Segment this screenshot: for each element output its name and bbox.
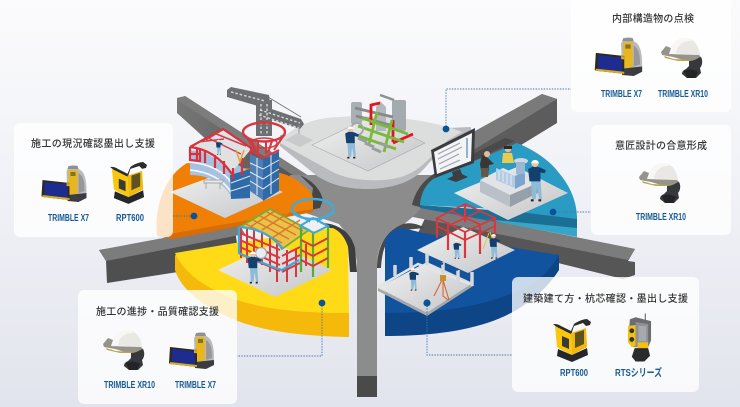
tanks [351, 95, 406, 131]
heading: 施工の進捗・品質確認支援 [96, 305, 219, 318]
heading: 意匠設計の合意形成 [615, 139, 707, 152]
platform: foundation layout [378, 204, 515, 316]
crane [227, 87, 313, 147]
icon: Trimble X7 [42, 165, 86, 202]
wedge: navy [377, 223, 559, 336]
icon: Trimble X7 [169, 332, 214, 369]
wedge: teal [412, 138, 577, 237]
worker [345, 126, 359, 158]
marker dots [191, 126, 556, 307]
worker middle [502, 146, 514, 163]
icon: RPT600 [553, 319, 591, 362]
panel: erection and layout support [512, 277, 699, 392]
worker right [528, 160, 546, 201]
red ring [243, 122, 285, 158]
wedge: orange [157, 163, 323, 239]
platform: progress building [218, 199, 334, 297]
arm: upper left [177, 96, 315, 210]
heading: 内部構造物の点検 [612, 12, 694, 25]
platform: site survey building [170, 122, 285, 218]
icon: Trimble XR10 [661, 38, 702, 78]
icon: RPT600 [110, 162, 147, 204]
scan ring [351, 123, 363, 135]
label: RPT600: RPT600 [560, 367, 588, 379]
icon: Trimble X7 [595, 37, 642, 76]
heading: 施工の現況確認墨出し支援 [31, 137, 155, 150]
icon: Trimble XR10 [103, 330, 144, 370]
label: RPT600: RPT600 [116, 212, 144, 224]
label: RTS series: RTSシリーズ [615, 366, 662, 379]
scan ring [256, 248, 266, 258]
roof grid [240, 209, 309, 249]
worker [248, 251, 262, 283]
platform: design review [431, 128, 568, 220]
arm: bottom end face [357, 376, 377, 397]
heading: 建築建て方・杭芯確認・墨出し支援 [523, 292, 688, 305]
upper floor [417, 204, 515, 273]
hub: gray road structure [99, 94, 635, 397]
arm: left [99, 224, 245, 283]
icon: Trimble XR10 [639, 163, 680, 203]
label: XR10: TRIMBLE XR10 [658, 88, 708, 100]
icon: RTS series [628, 313, 651, 362]
pipes [355, 103, 413, 152]
label: X7: TRIMBLE X7 [48, 212, 89, 224]
label: XR10: TRIMBLE XR10 [104, 379, 155, 391]
lower floor [378, 253, 473, 316]
label: X7: TRIMBLE X7 [601, 88, 642, 100]
wedge: yellow [175, 223, 357, 337]
green tower [300, 218, 328, 277]
curved low building [190, 129, 252, 199]
blue ring [292, 199, 334, 222]
panel: internal structure inspection [571, 0, 731, 112]
panel: site condition and marking [14, 123, 173, 237]
model table [480, 168, 538, 207]
label: XR10: TRIMBLE XR10 [636, 211, 686, 223]
leader lines [173, 89, 591, 356]
label: X7: TRIMBLE X7 [175, 379, 216, 391]
monitor [431, 128, 475, 182]
top gray slab [280, 116, 471, 189]
arm: right [408, 206, 635, 279]
tower [250, 151, 279, 201]
model [496, 158, 528, 189]
panel: progress and quality [78, 290, 237, 404]
panel: design consensus [591, 125, 731, 235]
platform: inspection [312, 95, 425, 171]
red frame [240, 228, 306, 282]
teal edge [239, 227, 299, 270]
worker left [480, 151, 494, 177]
arm: upper right [446, 94, 557, 178]
hub centre [290, 175, 450, 397]
